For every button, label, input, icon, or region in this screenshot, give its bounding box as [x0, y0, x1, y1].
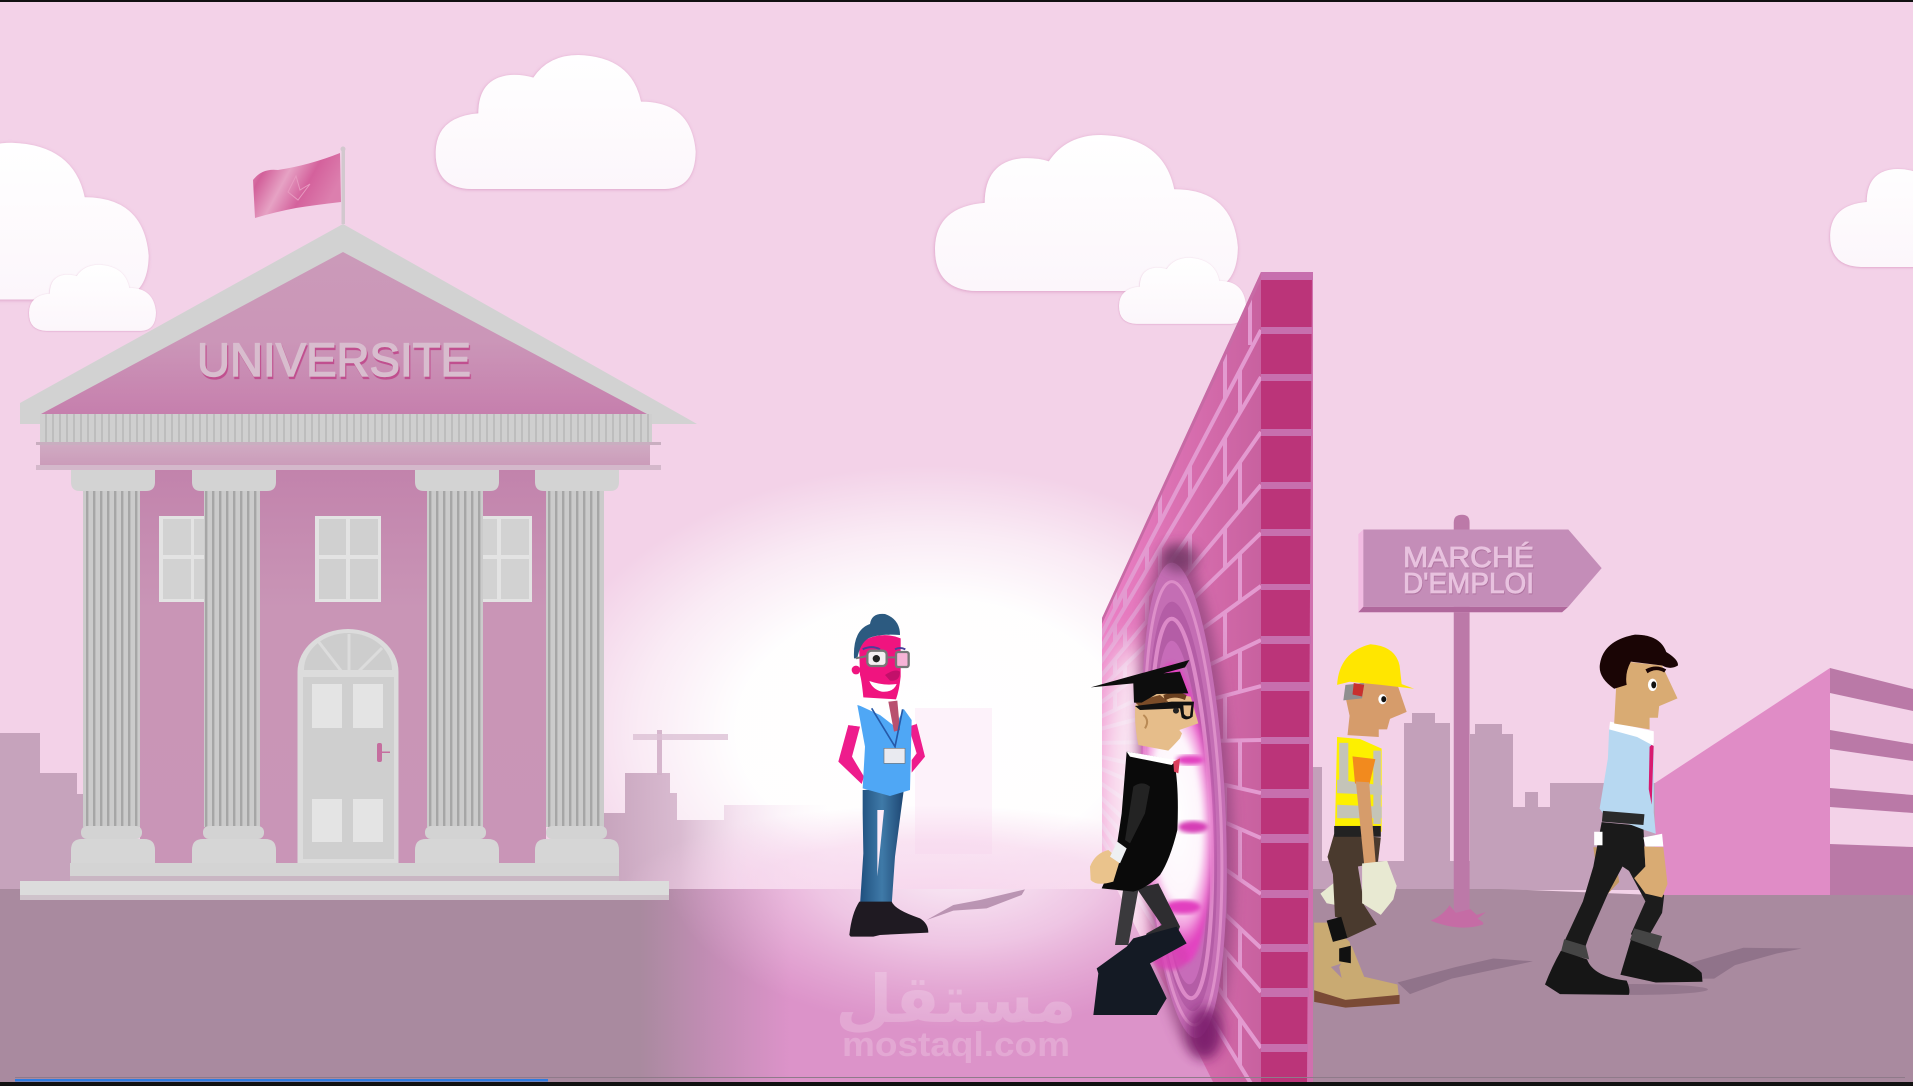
adviser hair	[854, 614, 900, 658]
column 1	[71, 470, 155, 863]
worker legs	[1328, 834, 1381, 938]
watermark: مستقل	[835, 961, 1077, 1038]
adviser head	[859, 635, 901, 699]
worker hard hat	[1337, 644, 1414, 689]
right window	[480, 516, 532, 602]
pale distant building in the glow	[915, 708, 992, 854]
adviser shoes	[849, 902, 928, 937]
businessman shadow	[1689, 948, 1802, 979]
steps	[20, 863, 669, 900]
businessman head	[1614, 662, 1678, 729]
adviser vest	[857, 705, 912, 796]
white light glow	[530, 460, 1320, 900]
cloud: small centre	[1119, 258, 1246, 324]
facade wall	[140, 470, 546, 863]
worker head	[1345, 683, 1407, 737]
worker boots	[1339, 946, 1400, 1004]
signpost	[1358, 515, 1602, 928]
entablature band	[40, 445, 650, 465]
character: smiling adviser	[838, 614, 1025, 937]
graduate magenta glow at the foot	[1152, 943, 1188, 970]
cloud: small left	[29, 265, 156, 331]
worker shadow	[1398, 959, 1533, 994]
adviser arms	[838, 723, 925, 784]
character: businessman	[1545, 635, 1802, 995]
character: construction worker	[1314, 644, 1533, 1008]
adviser shadow	[927, 889, 1025, 920]
centre window	[315, 516, 381, 602]
skyline behind the sign	[1313, 713, 1660, 890]
graduate gown	[1102, 752, 1178, 892]
graduate legs	[1115, 888, 1138, 945]
worker gloves	[1362, 861, 1397, 915]
sign lower lip	[1358, 529, 1568, 612]
adviser glasses	[867, 651, 909, 667]
ground	[0, 889, 1913, 1086]
flag	[253, 146, 346, 224]
graduate glasses	[1135, 702, 1194, 719]
left window	[159, 516, 207, 602]
column 2	[192, 470, 276, 863]
adviser badge	[884, 748, 905, 763]
businessman hair	[1600, 635, 1678, 689]
pink building on the right	[1655, 668, 1913, 895]
swirling portal in the wall	[1098, 543, 1245, 1059]
skyline left of university	[0, 733, 100, 890]
skyline and crane fading into the glow	[600, 730, 830, 890]
businessman cuff and hand	[1643, 834, 1663, 846]
sign text	[1403, 541, 1534, 600]
watermark: mostaql.com	[842, 1026, 1070, 1064]
businessman far hand	[1593, 847, 1619, 894]
businessman near leg and trousers	[1564, 822, 1645, 954]
graduate hand	[1090, 850, 1120, 884]
sign text: D'EMPLOI	[1403, 568, 1534, 600]
sign text: MARCHÉ	[1403, 541, 1534, 574]
brick wall side face	[1102, 272, 1261, 1082]
graduate cap	[1091, 660, 1189, 703]
character: graduate entering the portal	[1090, 660, 1198, 1015]
worker back glove	[1320, 882, 1337, 905]
frieze	[40, 414, 652, 442]
ground light from the portal	[662, 889, 1213, 1082]
brick wall front face	[1261, 272, 1313, 1082]
university name: UNIVERSITE	[197, 333, 471, 386]
column 3	[415, 470, 499, 863]
door	[298, 629, 398, 863]
roof pediment	[20, 224, 697, 424]
graduate head	[1135, 692, 1198, 751]
businessman shirt	[1600, 727, 1656, 834]
worker arm	[1353, 756, 1375, 785]
graduate shoes	[1093, 927, 1187, 1015]
cloud: top centre	[436, 55, 696, 189]
cloud: large left	[0, 143, 149, 299]
horizon haze	[620, 805, 1260, 895]
businessman far leg	[1627, 867, 1664, 942]
adviser trousers	[860, 788, 904, 905]
university building	[20, 146, 697, 900]
column 4	[535, 470, 619, 863]
sign pole	[1454, 515, 1470, 915]
pole base	[1431, 905, 1486, 928]
cloud: centre	[935, 135, 1238, 291]
sign board	[1363, 529, 1602, 607]
worker vest	[1335, 737, 1382, 832]
cloud: right edge	[1830, 152, 1913, 267]
